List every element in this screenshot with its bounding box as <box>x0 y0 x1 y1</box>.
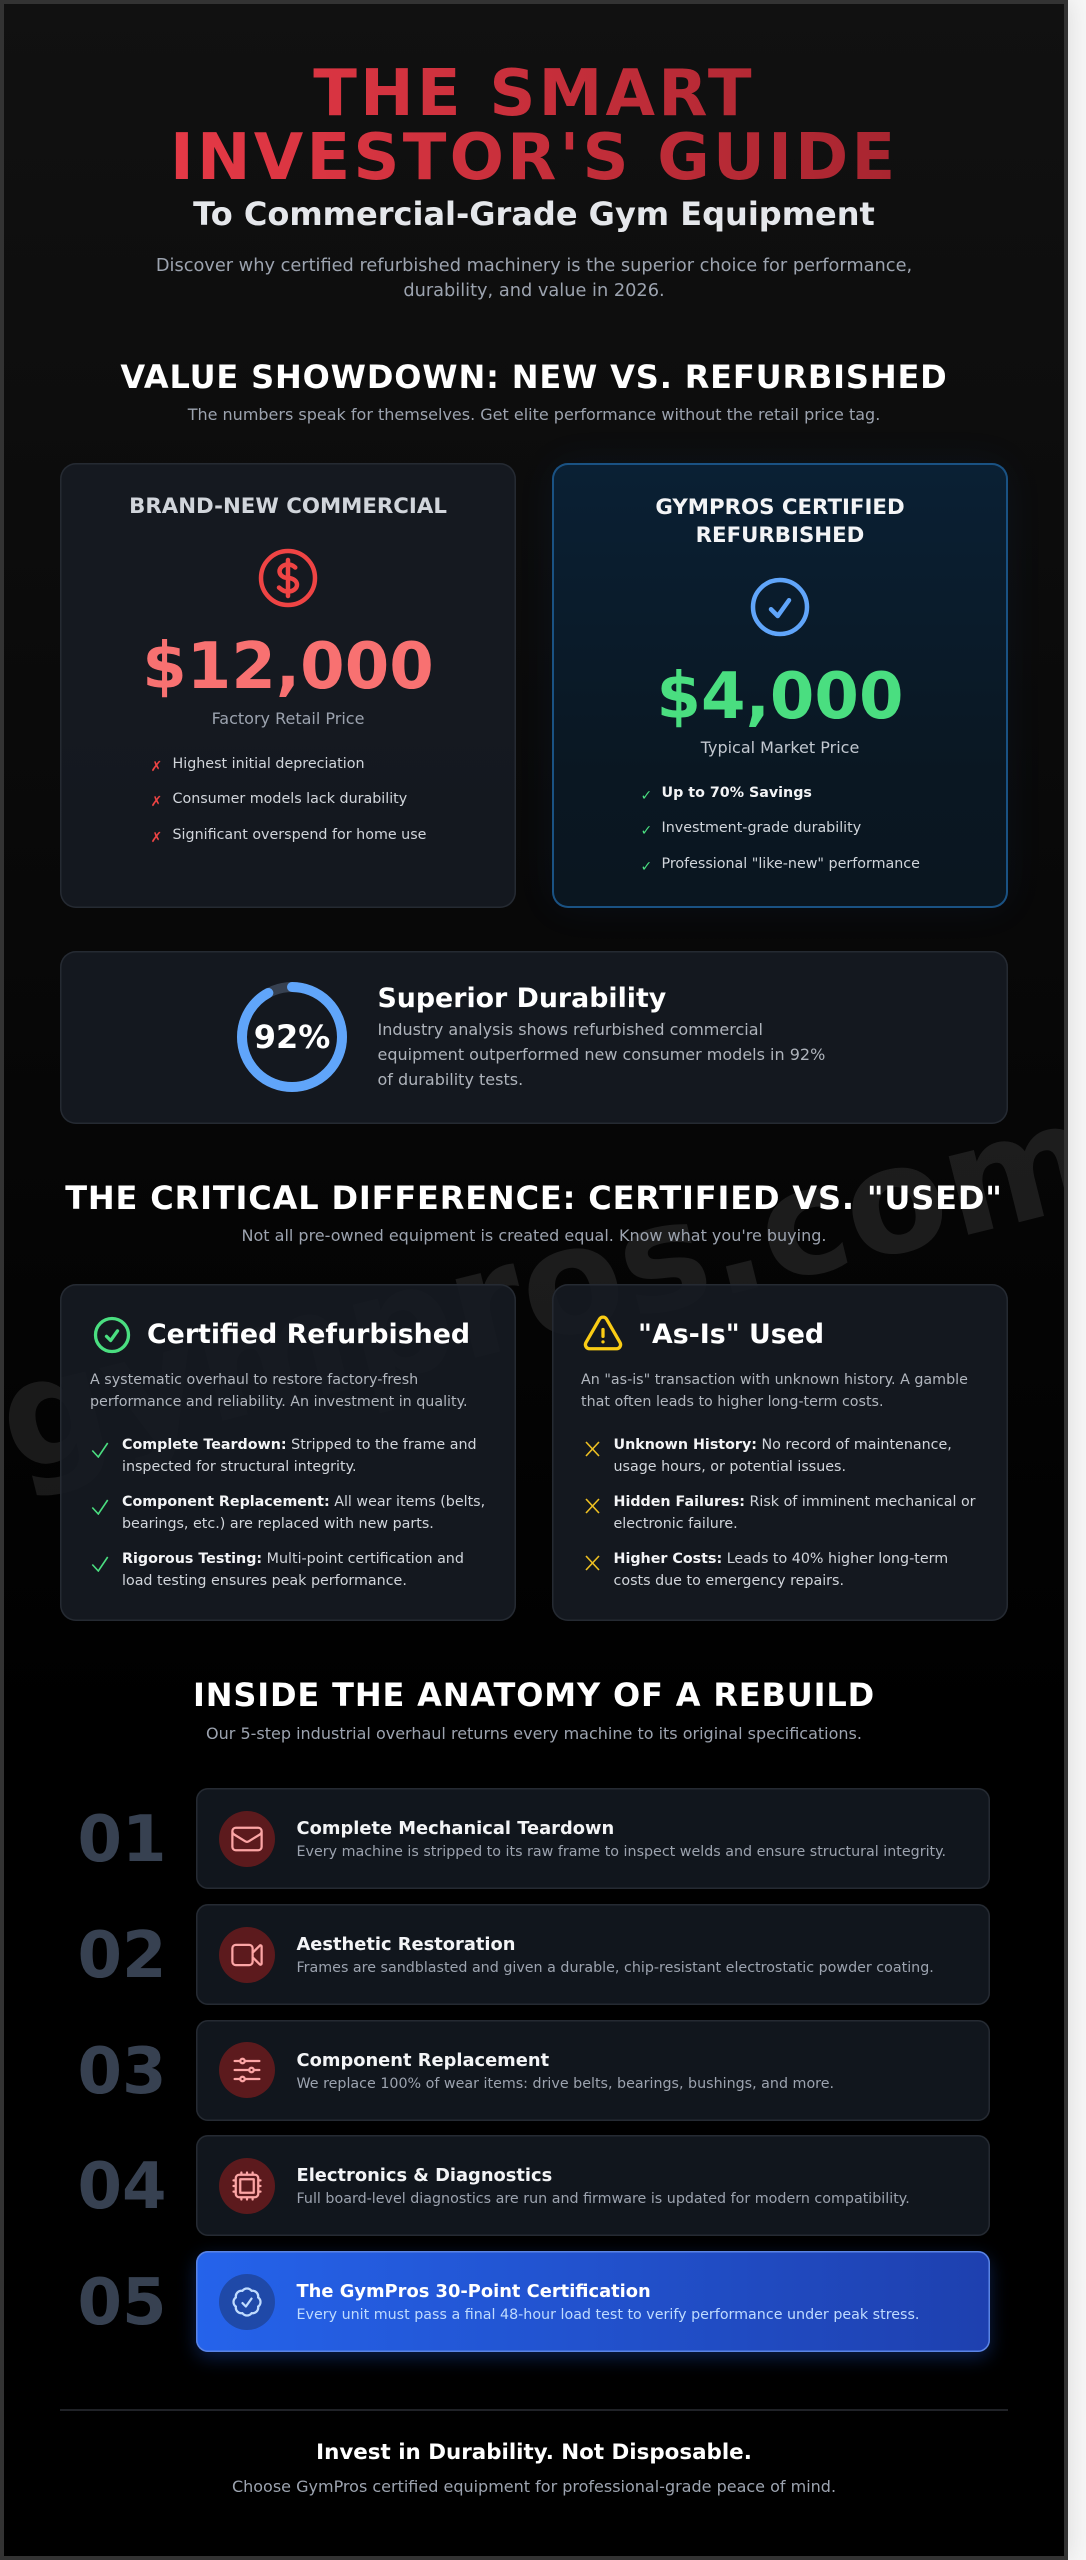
footer note: Choose GymPros certified equipment for professional-grade peace of mind. <box>232 2477 836 2496</box>
icon: warning triangle <box>584 1316 622 1350</box>
feature text <box>122 1494 485 1532</box>
description <box>90 1372 468 1410</box>
step title: Electronics & Diagnostics <box>296 2165 552 2186</box>
step 4 <box>60 2135 990 2236</box>
risk text: Higher Costs: Leads to 40% higher long-term <box>614 1551 948 1567</box>
donut chart: 92%: 92% <box>253 1018 330 1056</box>
step card <box>196 1788 990 1889</box>
step 1 <box>60 1788 990 1889</box>
step card <box>196 1904 990 2005</box>
icon: adjustment sliders <box>218 2042 274 2098</box>
benefit list: ✓ <box>640 788 652 804</box>
step 2 <box>60 1904 990 2005</box>
price: $4,000 <box>657 660 903 734</box>
intro text: durability, and value in 2026. <box>403 281 665 301</box>
title: INVESTOR'S GUIDE <box>170 121 898 195</box>
subheading: The numbers speak for themselves. Get elite performance without the retail price tag. <box>188 405 880 424</box>
donut chart: 92% <box>237 982 347 1092</box>
risk text <box>614 1437 952 1475</box>
description: of durability tests. <box>378 1070 523 1089</box>
title: THE SMART <box>313 57 755 131</box>
drawback 3: Significant overspend for home use <box>172 827 426 843</box>
heading: VALUE SHOWDOWN: NEW VS. REFURBISHED <box>120 358 948 396</box>
feature 3 <box>92 1551 464 1589</box>
price: $12,000 <box>142 630 434 704</box>
panel: brand-new commercial <box>60 463 516 908</box>
step card: certification <box>196 2251 990 2352</box>
step number: 05 <box>77 2266 167 2340</box>
heading: Certified Refurbished <box>147 1318 470 1350</box>
subheading: Not all pre-owned equipment is created equal. Know what you're buying. <box>242 1226 826 1245</box>
panel: certified refurbished <box>60 1284 516 1621</box>
step description: Every machine is stripped to its raw frame to inspect welds and ensure structural integrity. <box>296 1844 946 1860</box>
risk 3 <box>586 1551 948 1589</box>
feature text: bearings, etc.) are replaced with new parts. <box>122 1516 434 1532</box>
feature text: inspected for structural integrity. <box>122 1459 357 1475</box>
step title: Aesthetic Restoration <box>296 1934 516 1955</box>
section heading: critical difference <box>65 1179 1003 1245</box>
description: A systematic overhaul to restore factory-fresh <box>90 1372 418 1388</box>
card title <box>655 494 905 548</box>
price label: Typical Market Price <box>701 738 859 757</box>
benefit list: ✓ <box>640 823 652 839</box>
benefit list <box>640 784 920 875</box>
feature text: Rigorous Testing: Multi-point certification and <box>122 1551 464 1567</box>
panel: as-is used <box>552 1284 1008 1621</box>
card title: GYMPROS CERTIFIED <box>655 494 905 520</box>
heading: "As-Is" Used <box>638 1318 824 1350</box>
risk 2 <box>586 1494 976 1532</box>
step title: The GymPros 30-Point Certification <box>296 2281 651 2302</box>
drawback 1: Highest initial depreciation <box>172 756 364 772</box>
description <box>378 1020 825 1089</box>
cross mark <box>586 1442 600 1456</box>
card title: REFURBISHED <box>696 523 864 548</box>
check mark <box>92 1556 108 1572</box>
intro text: Discover why certified refurbished machinery is the superior choice for performance, <box>156 256 912 276</box>
description: An "as-is" transaction with unknown history. A gamble <box>581 1372 968 1388</box>
step number: 03 <box>77 2035 167 2109</box>
risk text: costs due to emergency repairs. <box>614 1573 844 1589</box>
description: performance and reliability. An investment in quality. <box>90 1394 468 1410</box>
header <box>156 57 912 301</box>
description <box>581 1372 968 1410</box>
feature text <box>122 1551 464 1589</box>
benefit 1: Up to 70% Savings <box>662 784 812 800</box>
icon: check circle <box>94 1316 130 1354</box>
feature 2 <box>92 1494 485 1532</box>
description: that often leads to higher long-term costs. <box>581 1394 884 1410</box>
risk text: electronic failure. <box>614 1516 738 1532</box>
heading: Superior Durability <box>378 982 666 1014</box>
step description: We replace 100% of wear items: drive belts, bearings, bushings, and more. <box>296 2076 834 2092</box>
cross mark <box>586 1556 600 1570</box>
icon: check circle <box>750 578 810 636</box>
subheading: Our 5-step industrial overhaul returns every machine to its original specifications. <box>206 1724 862 1742</box>
description: equipment outperformed new consumer models in 92% <box>378 1045 825 1064</box>
panel: superior durability <box>60 951 1008 1124</box>
step number: 01 <box>77 1803 167 1877</box>
benefit list: ✓ <box>640 859 652 875</box>
step card <box>196 2135 990 2236</box>
feature 1 <box>92 1437 477 1475</box>
description: Industry analysis shows refurbished commercial <box>378 1020 763 1039</box>
drawback list: ✗ <box>150 794 162 810</box>
drawback list <box>150 756 426 846</box>
step 3 <box>60 2020 990 2121</box>
icon: check badge <box>218 2274 274 2330</box>
icon: cpu chip <box>218 2158 274 2214</box>
intro text <box>156 256 912 301</box>
risk text: Hidden Failures: Risk of imminent mechanical or <box>614 1494 976 1510</box>
risk text <box>614 1494 976 1532</box>
price label: Factory Retail Price <box>212 708 364 728</box>
risk text <box>614 1551 948 1589</box>
risk 1 <box>586 1437 952 1475</box>
step 5 <box>60 2251 990 2352</box>
step title: Component Replacement <box>296 2050 549 2071</box>
check mark <box>92 1500 108 1515</box>
section heading: value showdown <box>120 358 948 424</box>
cross mark <box>586 1498 600 1514</box>
drawback list: ✗ <box>150 758 162 774</box>
footer <box>0 2409 1068 2509</box>
step card <box>196 2020 990 2121</box>
benefit 2: Investment-grade durability <box>662 820 861 836</box>
icon: video camera <box>218 1926 274 1982</box>
risk text: Unknown History: No record of maintenance, <box>614 1437 952 1453</box>
feature text: Component Replacement: All wear items (belts, <box>122 1494 485 1510</box>
card title: BRAND-NEW COMMERCIAL <box>129 494 447 519</box>
heading: THE CRITICAL DIFFERENCE: CERTIFIED VS. "USED" <box>65 1179 1003 1217</box>
heading: INSIDE THE ANATOMY OF A REBUILD <box>193 1676 875 1714</box>
footer headline: Invest in Durability. Not Disposable. <box>316 2440 752 2465</box>
step description: Frames are sandblasted and given a durable, chip-resistant electrostatic powder coating. <box>296 1960 934 1976</box>
title <box>170 62 898 190</box>
drawback 2: Consumer models lack durability <box>172 791 407 807</box>
benefit 3: Professional "like-new" performance <box>662 856 920 872</box>
step description: Every unit must pass a final 48-hour load test to verify performance under peak stress. <box>296 2307 919 2323</box>
drawback list: ✗ <box>150 830 162 846</box>
icon: envelope <box>218 1811 274 1867</box>
step description: Full board-level diagnostics are run and firmware is updated for modern compatibility. <box>296 2191 910 2207</box>
subtitle: To Commercial-Grade Gym Equipment <box>193 195 875 233</box>
feature text <box>122 1437 477 1475</box>
step number: 04 <box>77 2150 167 2224</box>
feature text: load testing ensures peak performance. <box>122 1573 407 1589</box>
section heading: anatomy of a rebuild <box>193 1676 875 1742</box>
risk text: usage hours, or potential issues. <box>614 1459 846 1475</box>
check mark <box>92 1442 108 1458</box>
step number: 02 <box>77 1919 167 1993</box>
step title: Complete Mechanical Teardown <box>296 1818 614 1839</box>
panel: gympros certified refurbished <box>552 463 1008 908</box>
icon: dollar <box>258 548 318 608</box>
feature text: Complete Teardown: Stripped to the frame and <box>122 1437 477 1453</box>
